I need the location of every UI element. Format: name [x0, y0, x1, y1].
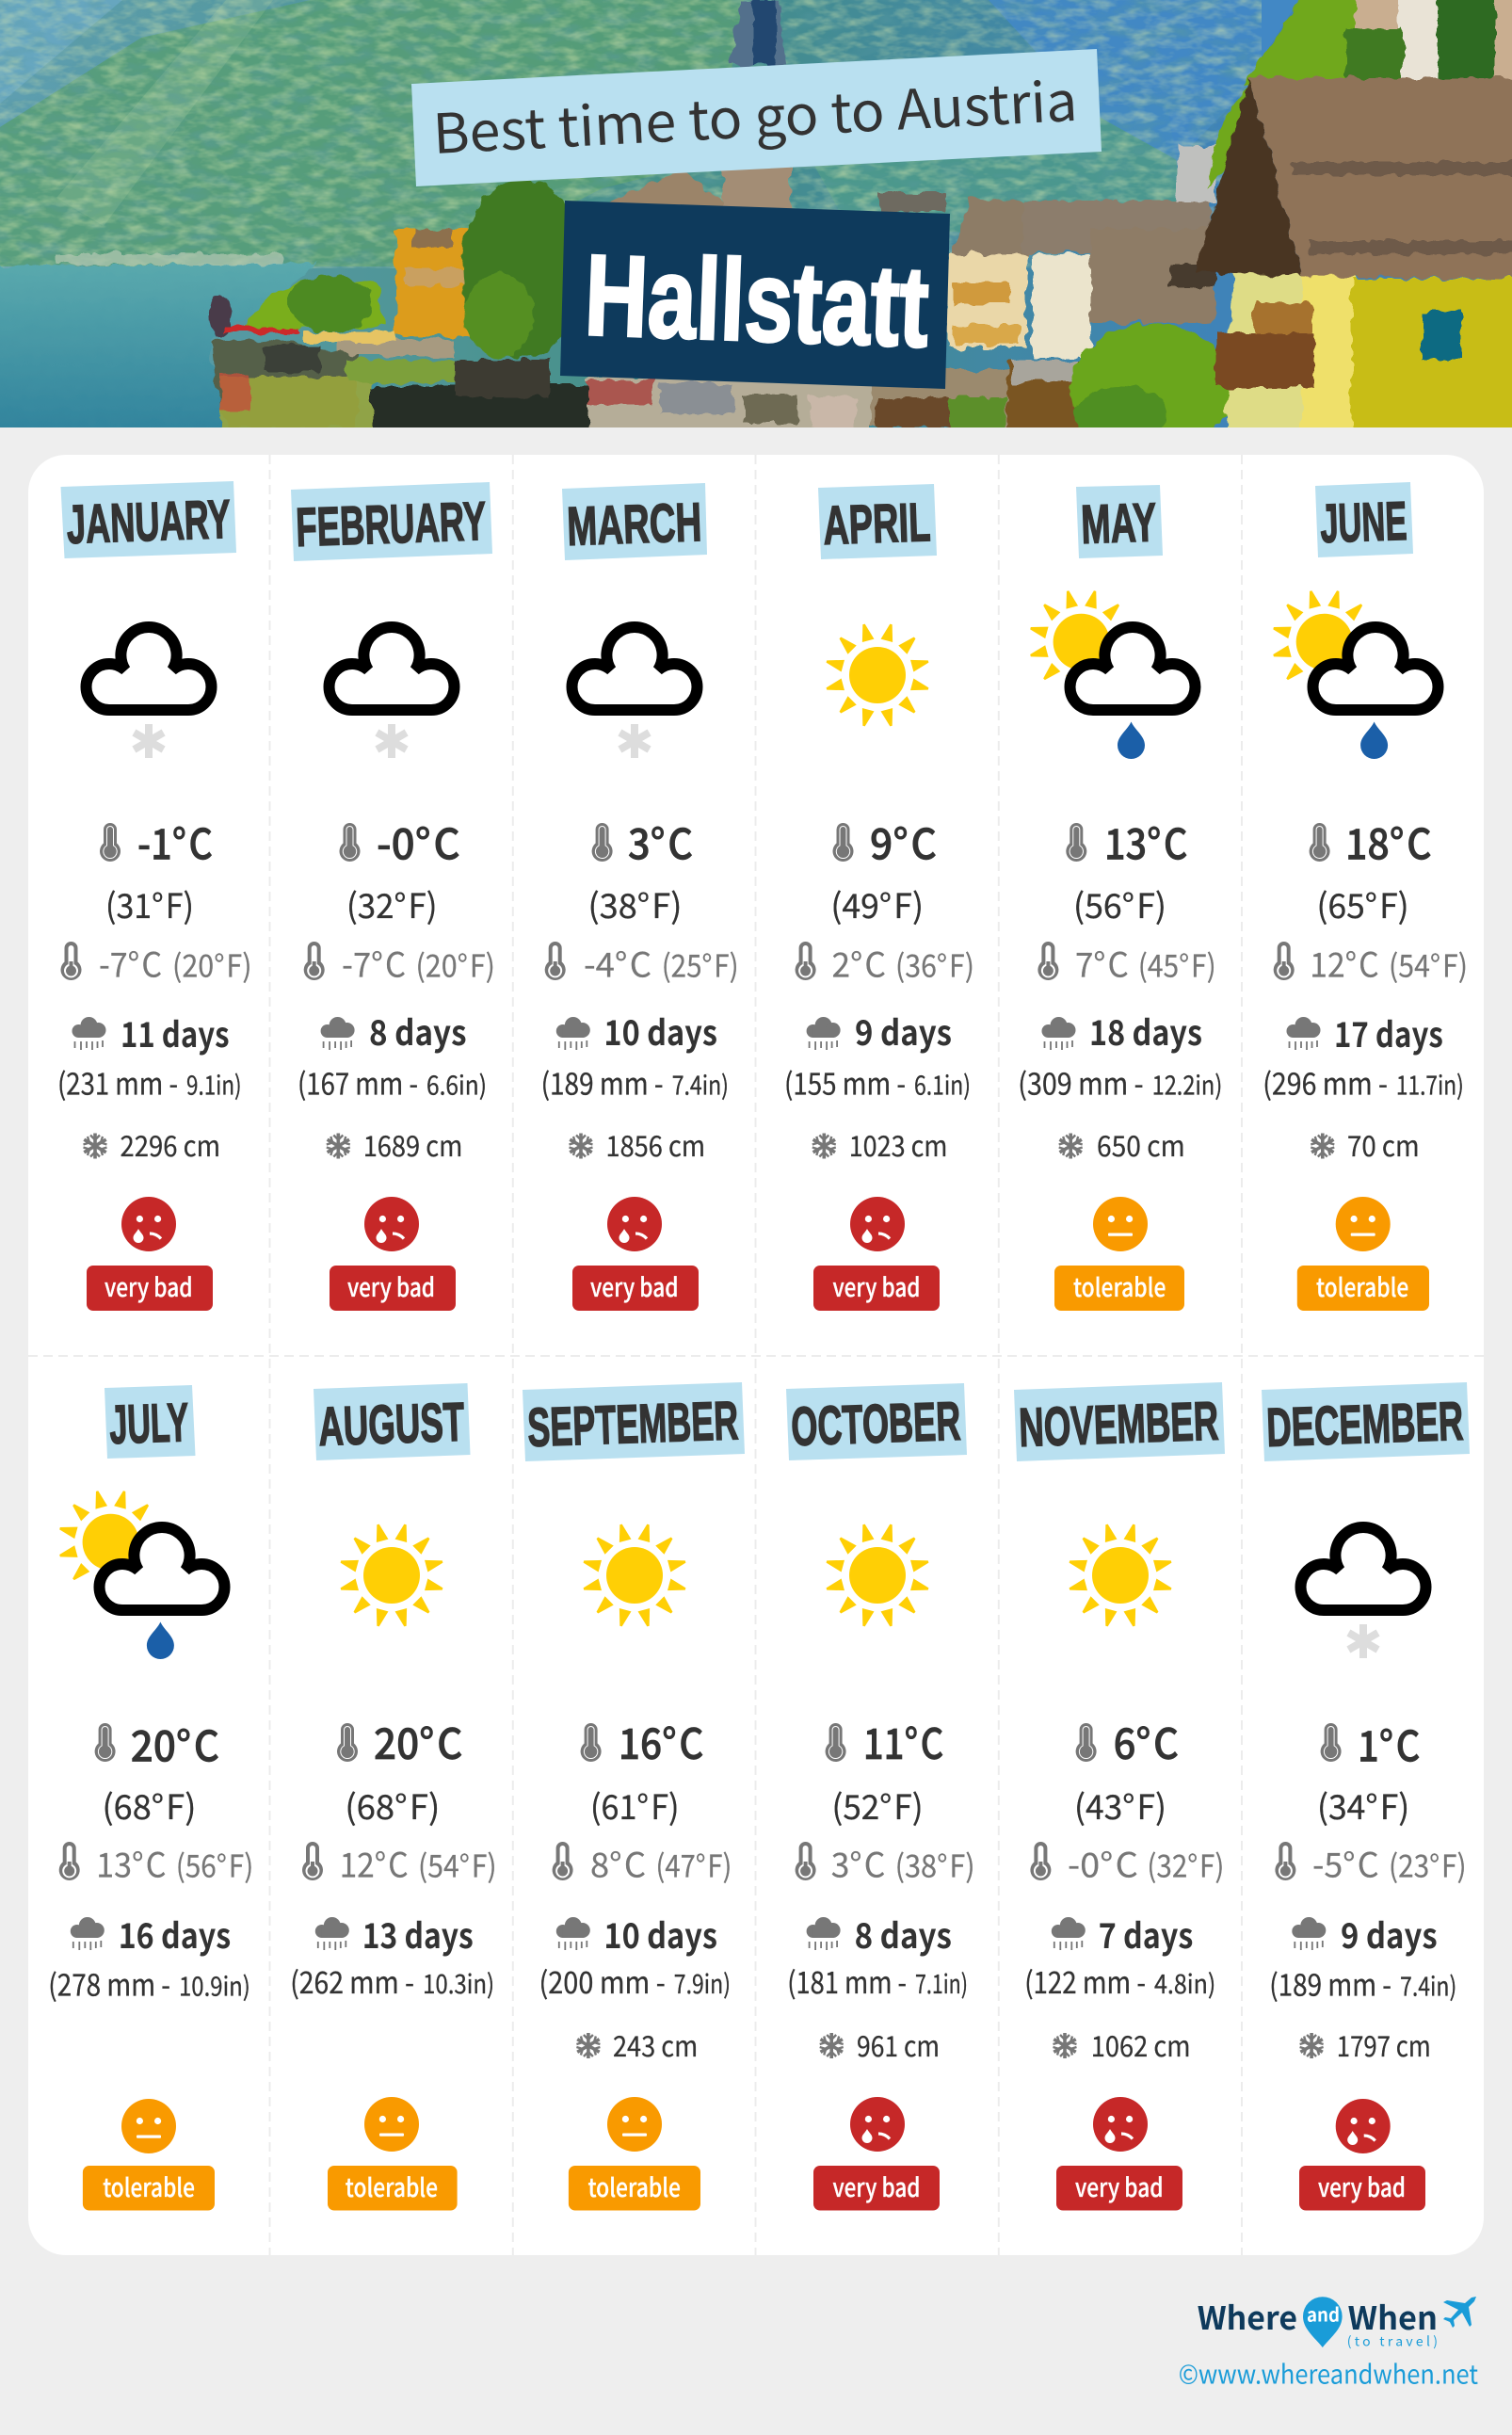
low temperature: 13° C	[96, 1839, 166, 1888]
low temperature: (20° F)	[416, 942, 495, 987]
rating: very bad: very bad	[832, 1267, 921, 1304]
rain days	[807, 1908, 952, 1959]
rain days	[1286, 1007, 1443, 1057]
rating: tolerable: tolerable	[103, 2168, 195, 2204]
card: January	[57, 481, 252, 1311]
high temperature	[1310, 810, 1432, 872]
rating: tolerable: tolerable	[1073, 1267, 1166, 1304]
high temperature: 20° C	[131, 1713, 219, 1774]
precipitation: (122 mm -	[1024, 1959, 1146, 2003]
rain days	[556, 1908, 717, 1959]
heading: February	[291, 482, 492, 561]
high temperature: 6° C	[1114, 1710, 1179, 1771]
precipitation: 7.9in)	[674, 1964, 731, 2002]
rain days	[315, 1908, 474, 1959]
title: Hallstatt: Hallstatt	[583, 231, 931, 371]
precipitation: (231 mm -	[57, 1060, 178, 1104]
precipitation: 7.1in)	[915, 1964, 968, 2002]
low temperature: 12° C	[1310, 938, 1379, 987]
rating: tolerable: tolerable	[587, 2168, 681, 2204]
card: December	[1262, 1382, 1470, 2211]
snow depth: 2296 cm	[121, 1123, 220, 1165]
high temperature fahrenheit: (61° F)	[590, 1781, 680, 1830]
low temperature: (38° F)	[895, 1842, 975, 1887]
card: July	[48, 1385, 253, 2211]
icon: sun, cloud and rain	[58, 1490, 224, 1659]
heading: October	[786, 1383, 967, 1460]
rain days: 16 days	[119, 1908, 231, 1959]
precipitation: 4.8in)	[1154, 1964, 1215, 2002]
rain days: 18 days	[1089, 1005, 1202, 1056]
rating: tolerable	[83, 2099, 215, 2211]
title: Hallstatt	[560, 201, 950, 389]
snow depth	[576, 2024, 698, 2065]
low temperature: (23° F)	[1389, 1842, 1467, 1887]
low temperature: 8° C	[590, 1839, 646, 1888]
low temperature: (56° F)	[176, 1842, 253, 1887]
logo: Where and When: and	[1307, 2300, 1340, 2328]
rain days: 11 days	[121, 1007, 230, 1057]
precipitation: 7.4in)	[1400, 1967, 1456, 2005]
heading: March: MARCH	[566, 492, 702, 557]
precipitation	[1263, 1060, 1464, 1104]
precipitation	[1018, 1060, 1222, 1104]
rain days	[807, 1005, 952, 1056]
heading: August	[314, 1383, 471, 1460]
rating: very bad: very bad	[105, 1267, 193, 1304]
snow depth: 70 cm	[1347, 1123, 1420, 1165]
banner: Best time to go to Austria: Best time to go to Austria	[431, 57, 1079, 169]
high temperature fahrenheit: (32° F)	[346, 879, 438, 928]
high temperature: 18° C	[1345, 810, 1432, 872]
snow depth: 650 cm	[1097, 1123, 1185, 1165]
precipitation: (278 mm -	[48, 1962, 170, 2006]
precipitation: (296 mm -	[1263, 1060, 1388, 1104]
low temperature: (54° F)	[418, 1842, 497, 1887]
snow depth: 1062 cm	[1091, 2024, 1190, 2065]
snow depth	[820, 2024, 940, 2065]
low temperature	[545, 938, 739, 987]
card: April	[784, 484, 974, 1311]
logo: Where and When: (to travel)	[1347, 2332, 1438, 2351]
low temperature	[796, 938, 974, 987]
precipitation: 10.3in)	[423, 1964, 494, 2002]
snow depth	[1311, 1123, 1420, 1165]
high temperature fahrenheit: (34° F)	[1317, 1781, 1409, 1830]
low temperature	[1030, 1839, 1224, 1888]
snow depth	[327, 1123, 462, 1165]
rating: very bad: very bad	[590, 1267, 679, 1304]
snow depth: 1689 cm	[363, 1123, 462, 1165]
low temperature: -7° C	[342, 938, 406, 987]
rain days	[71, 1908, 231, 1959]
precipitation: (167 mm -	[298, 1060, 418, 1104]
card: October	[786, 1383, 975, 2211]
precipitation: (189 mm -	[1269, 1962, 1391, 2006]
heading: March	[562, 483, 707, 560]
precipitation: (262 mm -	[290, 1959, 414, 2003]
icon: sun	[582, 1523, 687, 1628]
heading: April	[818, 484, 937, 559]
precipitation: 7.4in)	[672, 1066, 729, 1104]
low temperature: -5° C	[1312, 1839, 1379, 1888]
low temperature	[1275, 1839, 1467, 1888]
high temperature fahrenheit: (38° F)	[587, 879, 682, 928]
rain days: 17 days	[1334, 1007, 1443, 1057]
rating: very bad	[572, 1197, 699, 1311]
low temperature: (32° F)	[1147, 1842, 1224, 1887]
high temperature	[339, 810, 460, 872]
low temperature: 2° C	[832, 938, 886, 987]
high temperature	[592, 810, 693, 872]
high temperature fahrenheit: (31° F)	[105, 879, 194, 928]
rain days: 8 days	[369, 1005, 467, 1056]
low temperature	[60, 938, 252, 987]
rain days	[1292, 1908, 1438, 1959]
card: June	[1263, 482, 1468, 1311]
precipitation: (189 mm -	[541, 1060, 664, 1104]
high temperature: 11° C	[863, 1710, 943, 1771]
logo: Where and When: Where	[1198, 2293, 1297, 2339]
logo: Where and When: When	[1348, 2293, 1438, 2339]
rating: very bad: very bad	[1318, 2168, 1406, 2204]
low temperature	[796, 1839, 975, 1888]
high temperature fahrenheit: (52° F)	[832, 1781, 924, 1830]
card: May	[1018, 485, 1222, 1311]
heading: October: OCTOBER	[790, 1391, 961, 1458]
heading: August: AUGUST	[317, 1392, 465, 1458]
precipitation: (200 mm -	[539, 1959, 666, 2003]
icon: cloud with snow	[572, 627, 697, 758]
snow depth: 243 cm	[613, 2024, 698, 2065]
heading: April: APRIL	[822, 492, 931, 556]
low temperature	[59, 1839, 253, 1888]
snow depth: 961 cm	[857, 2024, 940, 2065]
icon: sun	[825, 622, 930, 728]
rating: tolerable	[1054, 1197, 1184, 1311]
precipitation	[290, 1959, 494, 2003]
logo: Where and When	[1198, 2293, 1476, 2351]
main white panel	[28, 455, 1484, 2255]
icon: cloud with snow	[330, 627, 454, 758]
icon: sun	[1068, 1523, 1173, 1628]
low temperature	[1274, 938, 1468, 987]
high temperature: -0° C	[377, 810, 460, 872]
high temperature	[1321, 1713, 1420, 1774]
snow depth	[1053, 2024, 1190, 2065]
card: August	[290, 1383, 497, 2211]
rating: very bad	[330, 1197, 456, 1311]
high temperature fahrenheit: (49° F)	[830, 879, 924, 928]
high temperature	[832, 810, 937, 872]
high temperature: 20° C	[374, 1710, 462, 1771]
icon: cloud with snow	[87, 627, 211, 758]
high temperature: 1° C	[1358, 1713, 1420, 1774]
rain days	[72, 1007, 230, 1057]
heading: May	[1076, 485, 1163, 558]
icon: sun	[825, 1523, 930, 1628]
rain days: 9 days	[855, 1005, 952, 1056]
precipitation: 6.1in)	[914, 1066, 971, 1104]
precipitation	[48, 1962, 250, 2006]
low temperature: 12° C	[340, 1839, 409, 1888]
heading: September: SEPTEMBER	[526, 1390, 739, 1459]
high temperature	[1076, 1710, 1179, 1771]
low temperature: (36° F)	[895, 942, 974, 987]
card: November	[1014, 1382, 1225, 2211]
card: September	[523, 1382, 745, 2211]
low temperature: -7° C	[99, 938, 162, 987]
rating: very bad	[87, 1197, 213, 1311]
precipitation: 6.6in)	[426, 1066, 487, 1104]
snow depth	[1300, 2024, 1431, 2065]
rain days: 10 days	[603, 1005, 717, 1056]
high temperature: 3° C	[628, 810, 693, 872]
low temperature	[1037, 938, 1216, 987]
heading: July	[105, 1385, 196, 1459]
precipitation: 12.2in)	[1152, 1066, 1222, 1104]
low temperature	[302, 1839, 497, 1888]
rain days	[1052, 1908, 1193, 1959]
heading: February: FEBRUARY	[295, 491, 487, 558]
snow depth: 1856 cm	[606, 1123, 705, 1165]
rain days: 9 days	[1341, 1908, 1438, 1959]
rain days	[556, 1005, 717, 1056]
heading: July: JULY	[108, 1392, 189, 1456]
rain days: 8 days	[855, 1908, 952, 1959]
precipitation: 9.1in)	[186, 1066, 242, 1104]
heading: May: MAY	[1080, 492, 1157, 556]
rain days	[1041, 1005, 1202, 1056]
precipitation: (181 mm -	[787, 1959, 907, 2003]
high temperature fahrenheit: (43° F)	[1074, 1781, 1166, 1830]
heading: June	[1315, 482, 1413, 557]
rating: tolerable	[328, 2097, 458, 2211]
heading: November	[1014, 1382, 1225, 1461]
low temperature: 3° C	[831, 1839, 885, 1888]
low temperature	[553, 1839, 732, 1888]
icon: sun	[339, 1523, 444, 1628]
rain days: 10 days	[603, 1908, 717, 1959]
high temperature	[95, 1713, 219, 1774]
rain days: 7 days	[1099, 1908, 1193, 1959]
high temperature fahrenheit: (65° F)	[1316, 879, 1409, 928]
rating: very bad: very bad	[1075, 2168, 1164, 2204]
high temperature: 9° C	[870, 810, 937, 872]
rating: very bad	[1056, 2097, 1182, 2211]
low temperature: (20° F)	[172, 942, 252, 987]
icon: cloud with snow	[1301, 1527, 1425, 1658]
high temperature	[100, 810, 213, 872]
high temperature: 16° C	[619, 1710, 703, 1771]
low temperature	[304, 938, 495, 987]
snow depth	[1059, 1123, 1185, 1165]
high temperature	[337, 1710, 462, 1771]
snow depth: 1797 cm	[1337, 2024, 1431, 2065]
snow depth	[812, 1123, 947, 1165]
precipitation: (155 mm -	[784, 1060, 906, 1104]
rating: very bad	[1299, 2099, 1425, 2211]
copyright website: ©www.whereandwhen.net	[1179, 2355, 1478, 2393]
high temperature fahrenheit: (68° F)	[102, 1781, 196, 1830]
high temperature	[581, 1710, 703, 1771]
card: March	[541, 483, 739, 1311]
rating: very bad: very bad	[832, 2168, 921, 2204]
header photo: Hallstatt village	[0, 0, 1512, 452]
rating: tolerable: tolerable	[346, 2168, 438, 2204]
rain days: 13 days	[362, 1908, 474, 1959]
heading: November: NOVEMBER	[1018, 1391, 1219, 1459]
low temperature: 7° C	[1075, 938, 1129, 987]
rating: tolerable	[1297, 1197, 1429, 1311]
precipitation: 11.7in)	[1396, 1066, 1464, 1104]
rating: very bad	[813, 2097, 940, 2211]
low temperature: -4° C	[584, 938, 651, 987]
rating: very bad: very bad	[347, 1267, 435, 1304]
high temperature	[826, 1710, 943, 1771]
icon: sun, cloud and rain	[1029, 589, 1195, 759]
high temperature: -1° C	[137, 810, 213, 872]
rating: tolerable	[569, 2097, 700, 2211]
heading: January: JANUARY	[66, 489, 232, 556]
high temperature	[1066, 810, 1187, 872]
low temperature: (45° F)	[1138, 942, 1216, 987]
card: February	[291, 482, 495, 1311]
low temperature: -0° C	[1068, 1839, 1138, 1888]
high temperature: 13° C	[1104, 810, 1187, 872]
heading: September	[523, 1382, 745, 1461]
low temperature: (25° F)	[662, 942, 739, 987]
high temperature fahrenheit: (56° F)	[1073, 879, 1166, 928]
rain days	[321, 1005, 467, 1056]
low temperature: (47° F)	[655, 1842, 732, 1887]
heading: January	[60, 481, 236, 558]
precipitation: 10.9in)	[179, 1967, 250, 2005]
precipitation: (309 mm -	[1018, 1060, 1144, 1104]
rating: very bad	[813, 1197, 940, 1311]
low temperature: (54° F)	[1389, 942, 1468, 987]
icon: sun, cloud and rain	[1272, 589, 1438, 759]
heading: June: JUNE	[1319, 491, 1407, 555]
snow depth: 1023 cm	[849, 1123, 947, 1165]
rating: tolerable: tolerable	[1316, 1267, 1408, 1304]
snow depth	[83, 1123, 220, 1165]
snow depth	[569, 1123, 705, 1165]
high temperature fahrenheit: (68° F)	[345, 1781, 440, 1830]
